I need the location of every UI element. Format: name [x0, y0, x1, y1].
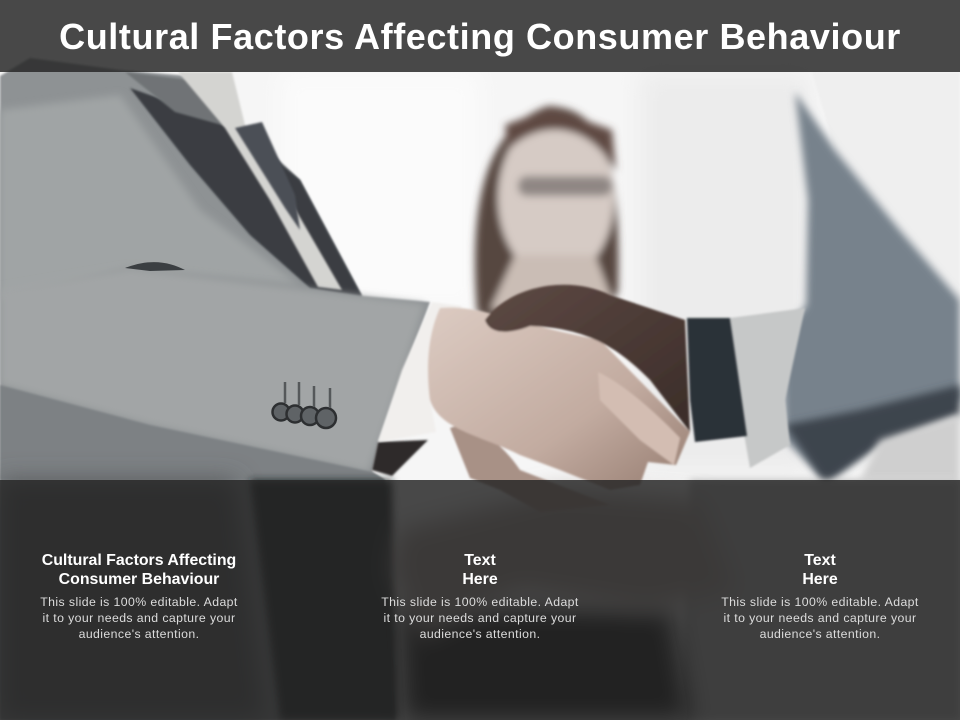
vest — [130, 88, 362, 296]
dark cuff — [687, 318, 747, 442]
column 2 text: Text — [464, 552, 496, 569]
reflection below hands — [392, 490, 735, 640]
sleeve — [0, 268, 425, 472]
upper jacket tone — [0, 95, 300, 300]
shirt — [178, 72, 342, 290]
left man: jacket — [0, 58, 462, 720]
column 2 text: it to your needs and capture your — [384, 611, 576, 625]
handshake — [428, 285, 690, 512]
column 2 text — [381, 552, 579, 641]
column 2 text: Here — [462, 571, 498, 588]
column 1 text: Consumer Behaviour — [59, 571, 219, 588]
tie — [235, 122, 300, 230]
right man — [680, 72, 960, 720]
column 2 text: This slide is 100% editable. Adapt — [381, 595, 579, 609]
collar — [125, 72, 240, 130]
column 1 text: it to your needs and capture your — [42, 611, 235, 625]
dark dress in band — [400, 610, 690, 720]
icon: jacket buttons — [272, 382, 336, 428]
column 3 text: it to your needs and capture your — [724, 611, 916, 625]
column 1 text: This slide is 100% editable. Adapt — [40, 595, 238, 609]
title band — [0, 0, 960, 72]
lower body in band — [0, 480, 265, 720]
column 1 text: audience's attention. — [79, 627, 199, 641]
column 1 text: Cultural Factors Affecting — [42, 552, 236, 569]
column 1 text — [40, 552, 238, 641]
woman in background — [475, 106, 618, 320]
title: Cultural Factors Affecting Consumer Behaviour — [59, 16, 901, 57]
background tones — [280, 72, 810, 472]
shirt cuff mottled — [730, 308, 805, 468]
lower body in band — [680, 480, 960, 720]
bottom band — [0, 480, 960, 720]
column 2 text: audience's attention. — [420, 627, 540, 641]
column 3 text: This slide is 100% editable. Adapt — [721, 595, 919, 609]
column 3 text: Here — [802, 571, 838, 588]
column 3 text: Text — [804, 552, 836, 569]
shirt cuff — [378, 302, 462, 442]
column 3 text — [721, 552, 919, 641]
column 3 text: audience's attention. — [760, 627, 880, 641]
